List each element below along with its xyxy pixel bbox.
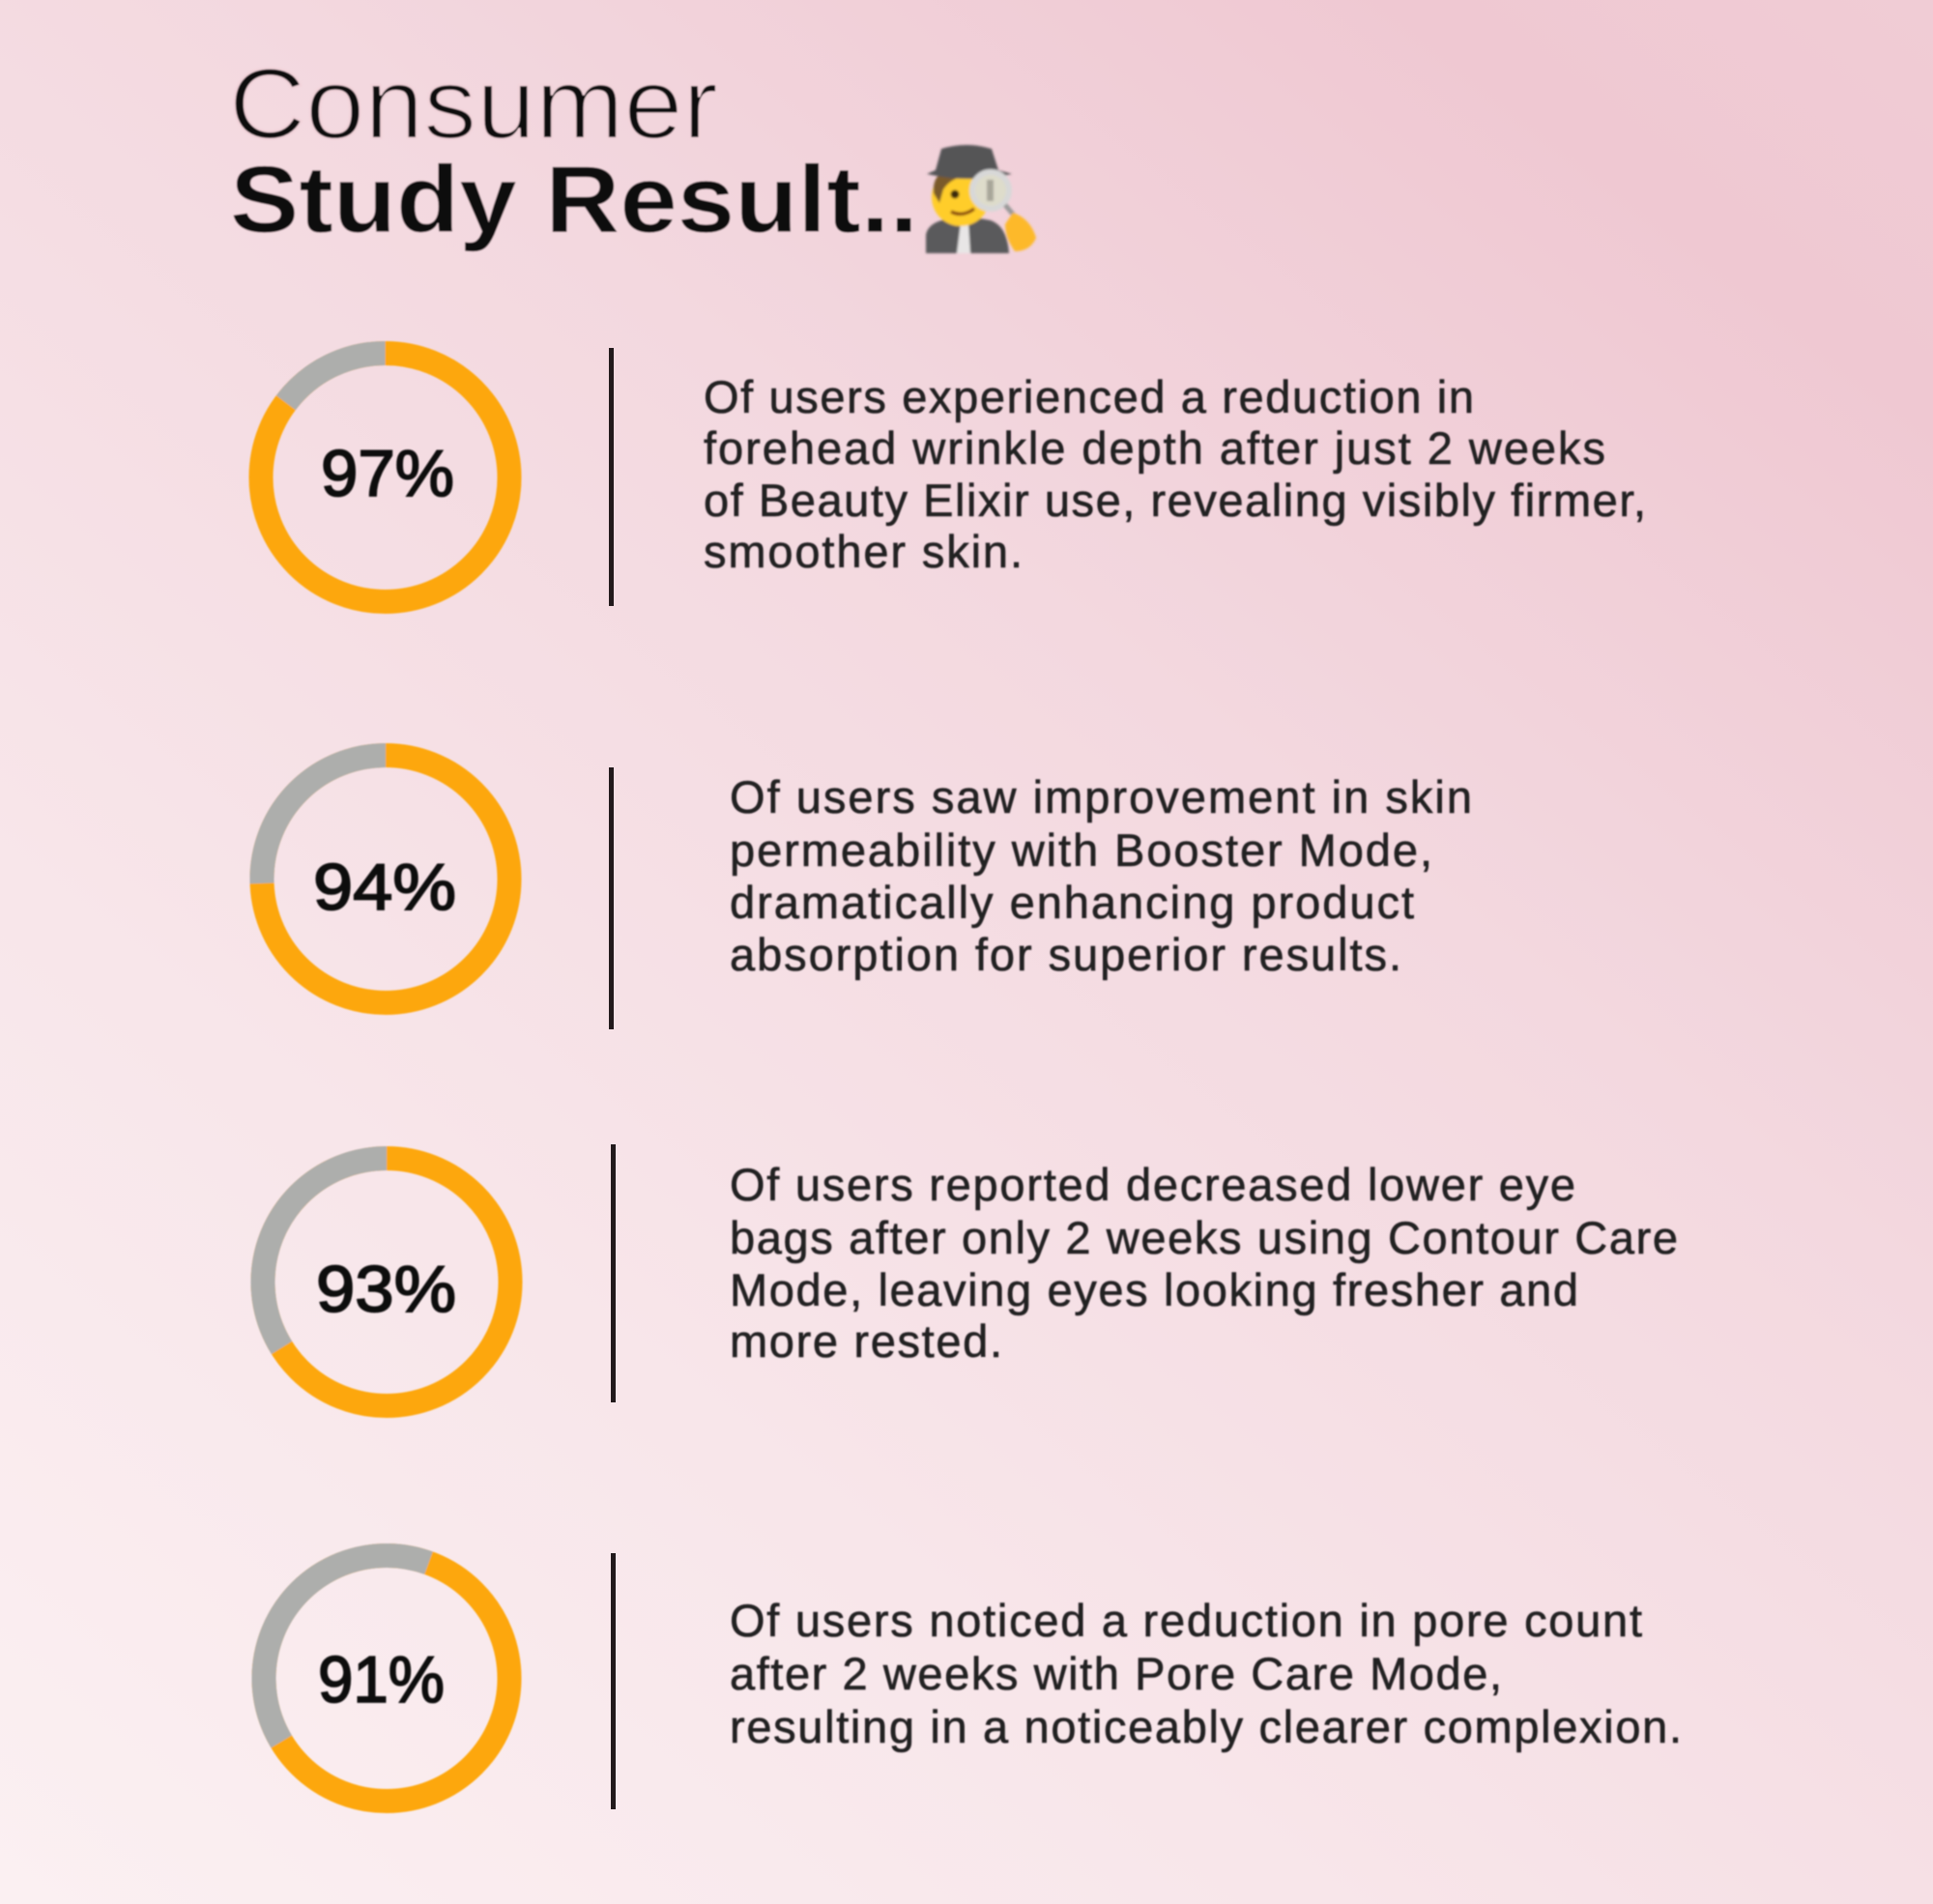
- panel: 94% stat: [258, 751, 1472, 1029]
- separator line: [611, 1144, 616, 1402]
- description: skin permeability: absorption for superior results.: [730, 929, 1401, 980]
- donut chart: 97%: 97%: [321, 437, 454, 510]
- icon: detective emoji: [926, 145, 1036, 253]
- description: lower eye bags: Mode, leaving eyes looking fresher and: [730, 1264, 1578, 1315]
- description: forehead wrinkles: smoother skin.: [704, 526, 1023, 577]
- donut chart: 97%: [212, 303, 559, 651]
- description: pore count: [730, 1595, 1682, 1752]
- panel: 91% stat: [218, 1510, 1682, 1847]
- description: pore count: Of users noticed a reduction in pore count: [730, 1595, 1642, 1646]
- panel: 97% stat: [212, 303, 1646, 651]
- separator line: [611, 1553, 616, 1809]
- description: pore count: resulting in a noticeably clearer complexion.: [730, 1701, 1682, 1752]
- panel: 93% stat: [216, 1111, 1678, 1453]
- description: forehead wrinkles: forehead wrinkle depth after just 2 weeks: [704, 422, 1605, 474]
- donut chart: 93%: 93%: [316, 1253, 456, 1326]
- donut chart: 94%: 94%: [313, 851, 456, 924]
- donut chart: 94%: [258, 751, 513, 1007]
- donut chart: 91%: 91%: [318, 1643, 445, 1716]
- description: lower eye bags: bags after only 2 weeks using Contour Care: [730, 1212, 1678, 1263]
- description: forehead wrinkles: of Beauty Elixir use, revealing visibly firmer,: [704, 475, 1646, 526]
- title: Study Result..: [230, 146, 918, 252]
- separator line: [609, 767, 614, 1029]
- description: forehead wrinkles: [704, 371, 1646, 577]
- donut chart: 93%: [216, 1111, 557, 1453]
- description: forehead wrinkles: Of users experienced a reduction in: [704, 371, 1474, 422]
- description: skin permeability: permeability with Booster Mode,: [730, 824, 1432, 876]
- title: Consumer: [229, 48, 718, 160]
- description: skin permeability: Of users saw improvement in skin: [730, 771, 1472, 822]
- description: lower eye bags: [730, 1159, 1678, 1367]
- description: skin permeability: [730, 771, 1472, 980]
- description: pore count: after 2 weeks with Pore Care Mode,: [730, 1648, 1502, 1699]
- description: skin permeability: dramatically enhancing product: [730, 877, 1414, 928]
- description: lower eye bags: more rested.: [730, 1315, 1002, 1367]
- description: lower eye bags: Of users reported decreased lower eye: [730, 1159, 1575, 1210]
- title: [229, 48, 918, 252]
- donut chart: 91%: [218, 1510, 555, 1847]
- separator line: [609, 348, 614, 606]
